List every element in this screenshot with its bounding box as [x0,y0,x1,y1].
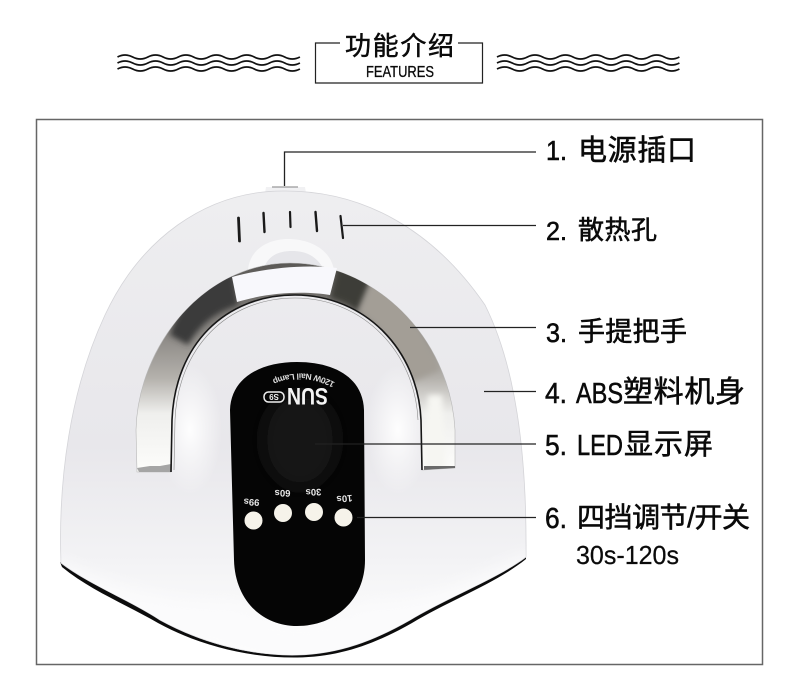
leader line 2 [343,224,536,226]
label 6 range: 30s-120s [576,540,679,570]
title: 功能介绍 [345,31,454,61]
lamp: control panel [230,362,365,626]
label 6: 四挡调节/开关 [577,502,750,533]
leader line 3 [410,326,536,328]
label 5: LED [577,430,623,462]
label 4: 塑料机身 [623,376,745,409]
lamp: base shadow edge [60,556,526,658]
lamp: soft highlight beside handle [158,365,222,495]
labels [545,134,750,570]
label 1: 电源插口 [578,134,696,167]
lamp: timer labels: 10s [336,492,353,504]
lamp: S9 badge [264,392,284,402]
label 4: 4. [545,378,567,410]
label 2: 2. [546,216,567,246]
nail lamp product [60,186,526,658]
lamp: panel reflection [262,392,338,488]
label 5: 显示屏 [624,429,713,461]
label 1: 1. [546,135,567,166]
label 6: 6. [545,503,567,535]
leader line 4 [484,390,536,392]
label 3: 手提把手 [578,317,687,347]
lamp: timer labels: 30s [305,486,322,497]
label 4 [545,376,745,410]
leader line 5 [315,443,536,445]
lamp: soft highlight beside handle right [366,365,430,495]
lamp: timer buttons [244,503,352,530]
lamp: S9 badge: S9 [269,392,279,401]
lamp: handle loop [248,239,334,270]
lamp: body [61,191,526,655]
label 5: 5. [545,430,567,462]
lamp: chrome handle [136,263,455,472]
lamp: panel model line: 120W Nail Lamp [273,373,335,387]
lamp: timer labels: 99s [243,495,260,508]
header: wavy ornament right [497,55,679,71]
lamp: power port [265,187,306,193]
lamp: panel branding: SUN [287,382,328,409]
subtitle: FEATURES [366,64,434,81]
label 2: 散热孔 [578,215,657,245]
lamp: timer labels [243,486,353,508]
label 3: 3. [546,318,567,348]
lamp: handle reflections [137,265,455,474]
label 5 [545,429,713,462]
photo frame [36,120,762,664]
label 2 [546,215,657,246]
lamp: vent slots [238,212,343,241]
lamp: handle centre grip [232,266,337,302]
leader line 1 [284,152,536,186]
leader line 6 [357,516,536,518]
lamp: bottom sheen [61,554,526,655]
label 4: ABS [576,378,623,410]
lamp: timer labels: 60s [274,487,291,498]
heading box [316,31,482,83]
lamp: handle inner black trim [171,295,422,472]
header: wavy ornament left [118,55,300,71]
